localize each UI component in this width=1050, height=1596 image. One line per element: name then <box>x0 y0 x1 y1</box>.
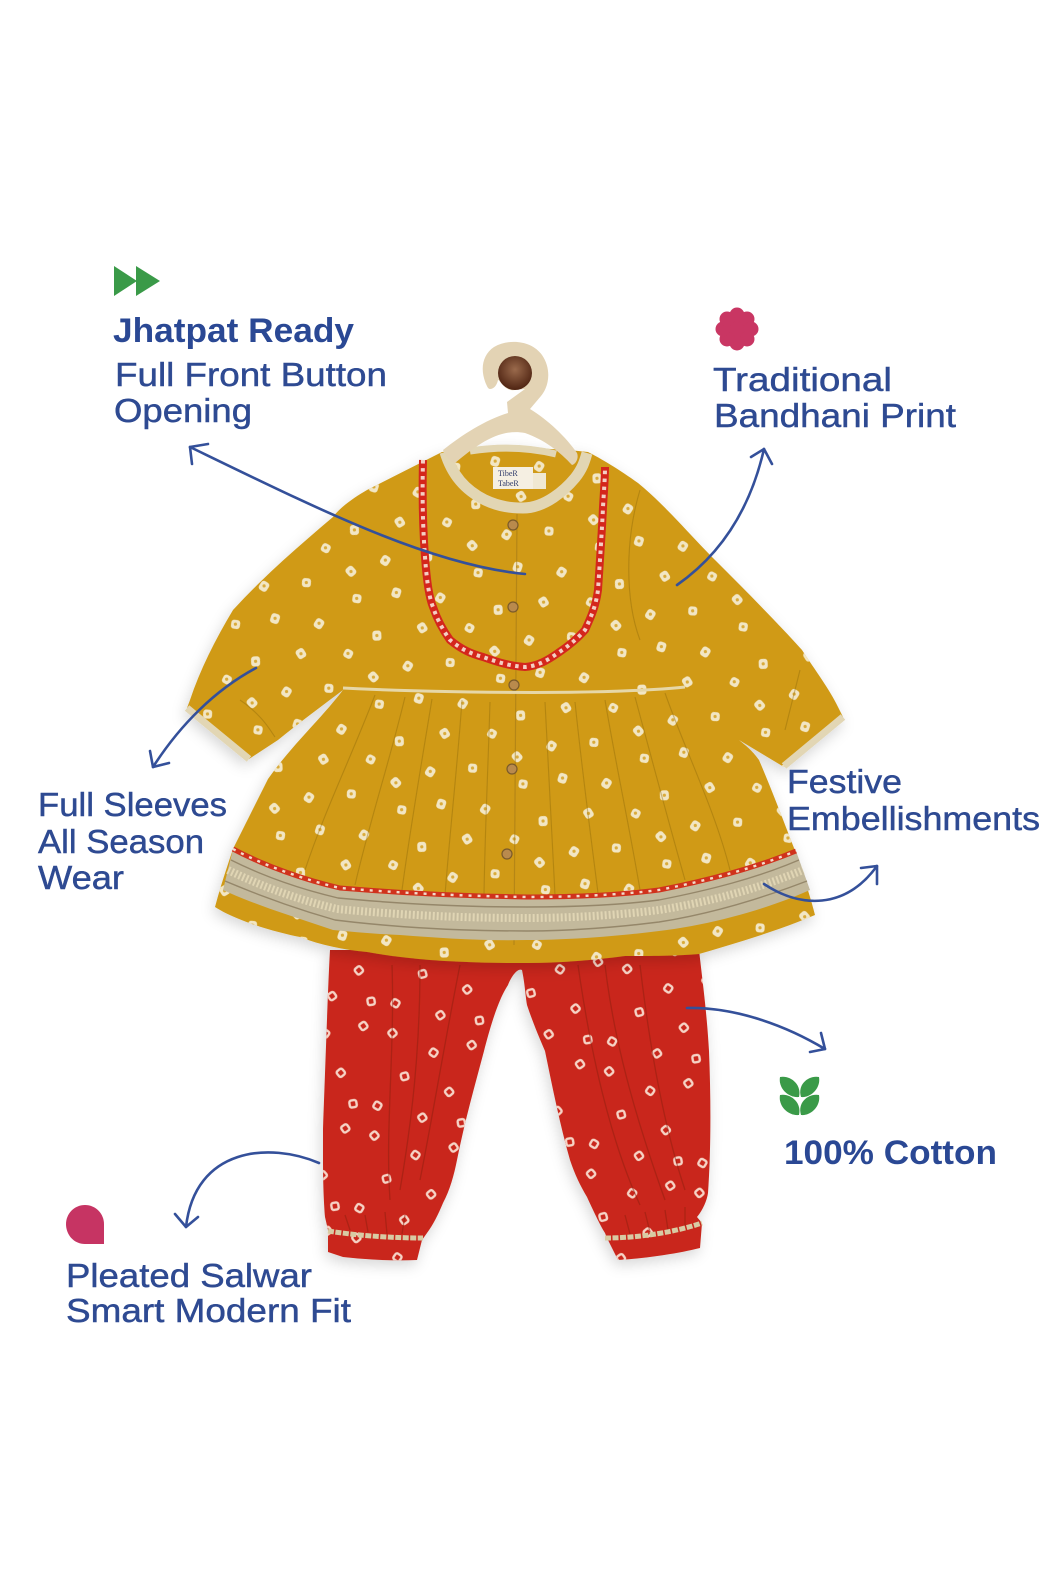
neck label: TabeR <box>498 479 519 488</box>
placket line <box>514 514 517 945</box>
yoke rope trim <box>423 460 605 667</box>
product photo: kurta and salwar on hanger <box>187 342 843 1260</box>
callout: full sleeves: All Season <box>38 823 204 860</box>
arrow: button opening <box>190 444 525 574</box>
red piping <box>233 849 796 897</box>
collar <box>445 452 587 508</box>
icon: fast forward <box>114 266 160 296</box>
arrow: cotton <box>687 1008 825 1052</box>
buttons <box>502 520 519 859</box>
hanger <box>443 342 578 465</box>
callout: traditional bandhani print <box>713 308 956 434</box>
callout: festive embellishments: Embellishments <box>787 800 1040 837</box>
text: pleated salwar smart modern fit: Smart Modern Fit <box>66 1292 351 1329</box>
callout: pleated salwar <box>66 1205 351 1329</box>
text: pleated salwar smart modern fit: Pleated Salwar <box>66 1257 312 1294</box>
text: pleated salwar smart modern fit <box>66 1257 351 1329</box>
callout: festive embellishments <box>787 763 1040 837</box>
waist seam <box>343 687 685 692</box>
text: traditional bandhani print <box>713 361 956 434</box>
callout: jhatpat ready <box>113 266 387 429</box>
callout: full sleeves <box>38 786 227 896</box>
callout: full sleeves: Full Sleeves <box>38 786 227 823</box>
text: traditional bandhani print: Traditional <box>713 361 892 398</box>
gota lace band <box>223 849 810 940</box>
kurta <box>187 448 843 963</box>
arrow: embellishments <box>764 866 877 901</box>
icon: flower <box>716 308 758 350</box>
neck label: TibeR <box>498 469 518 478</box>
text: full front button opening: Opening <box>114 392 252 429</box>
neck label <box>493 467 546 489</box>
text: full front button opening: Full Front Button <box>115 356 387 393</box>
cuffs <box>187 708 249 759</box>
salwar pleats <box>345 965 685 1234</box>
icon: drop shape <box>66 1205 104 1244</box>
heading: jhatpat ready: Jhatpat Ready <box>113 312 354 350</box>
icon: leaves <box>780 1077 819 1115</box>
arrow: salwar <box>175 1152 319 1227</box>
salwar cuff trims <box>328 1231 423 1238</box>
hanger knob <box>498 356 532 390</box>
text: full front button opening <box>114 356 387 429</box>
arrow: bandhani print <box>677 449 772 585</box>
back neck tape <box>470 448 556 454</box>
callout: cotton <box>780 1077 997 1172</box>
arrow: sleeves <box>150 668 256 767</box>
salwar pants <box>323 950 710 1260</box>
heading: 100% cotton: 100% Cotton <box>784 1134 997 1172</box>
skirt pleats <box>240 490 800 895</box>
text: traditional bandhani print: Bandhani Print <box>714 397 956 434</box>
callout: festive embellishments: Festive <box>787 763 902 800</box>
callout: full sleeves: Wear <box>38 859 124 896</box>
